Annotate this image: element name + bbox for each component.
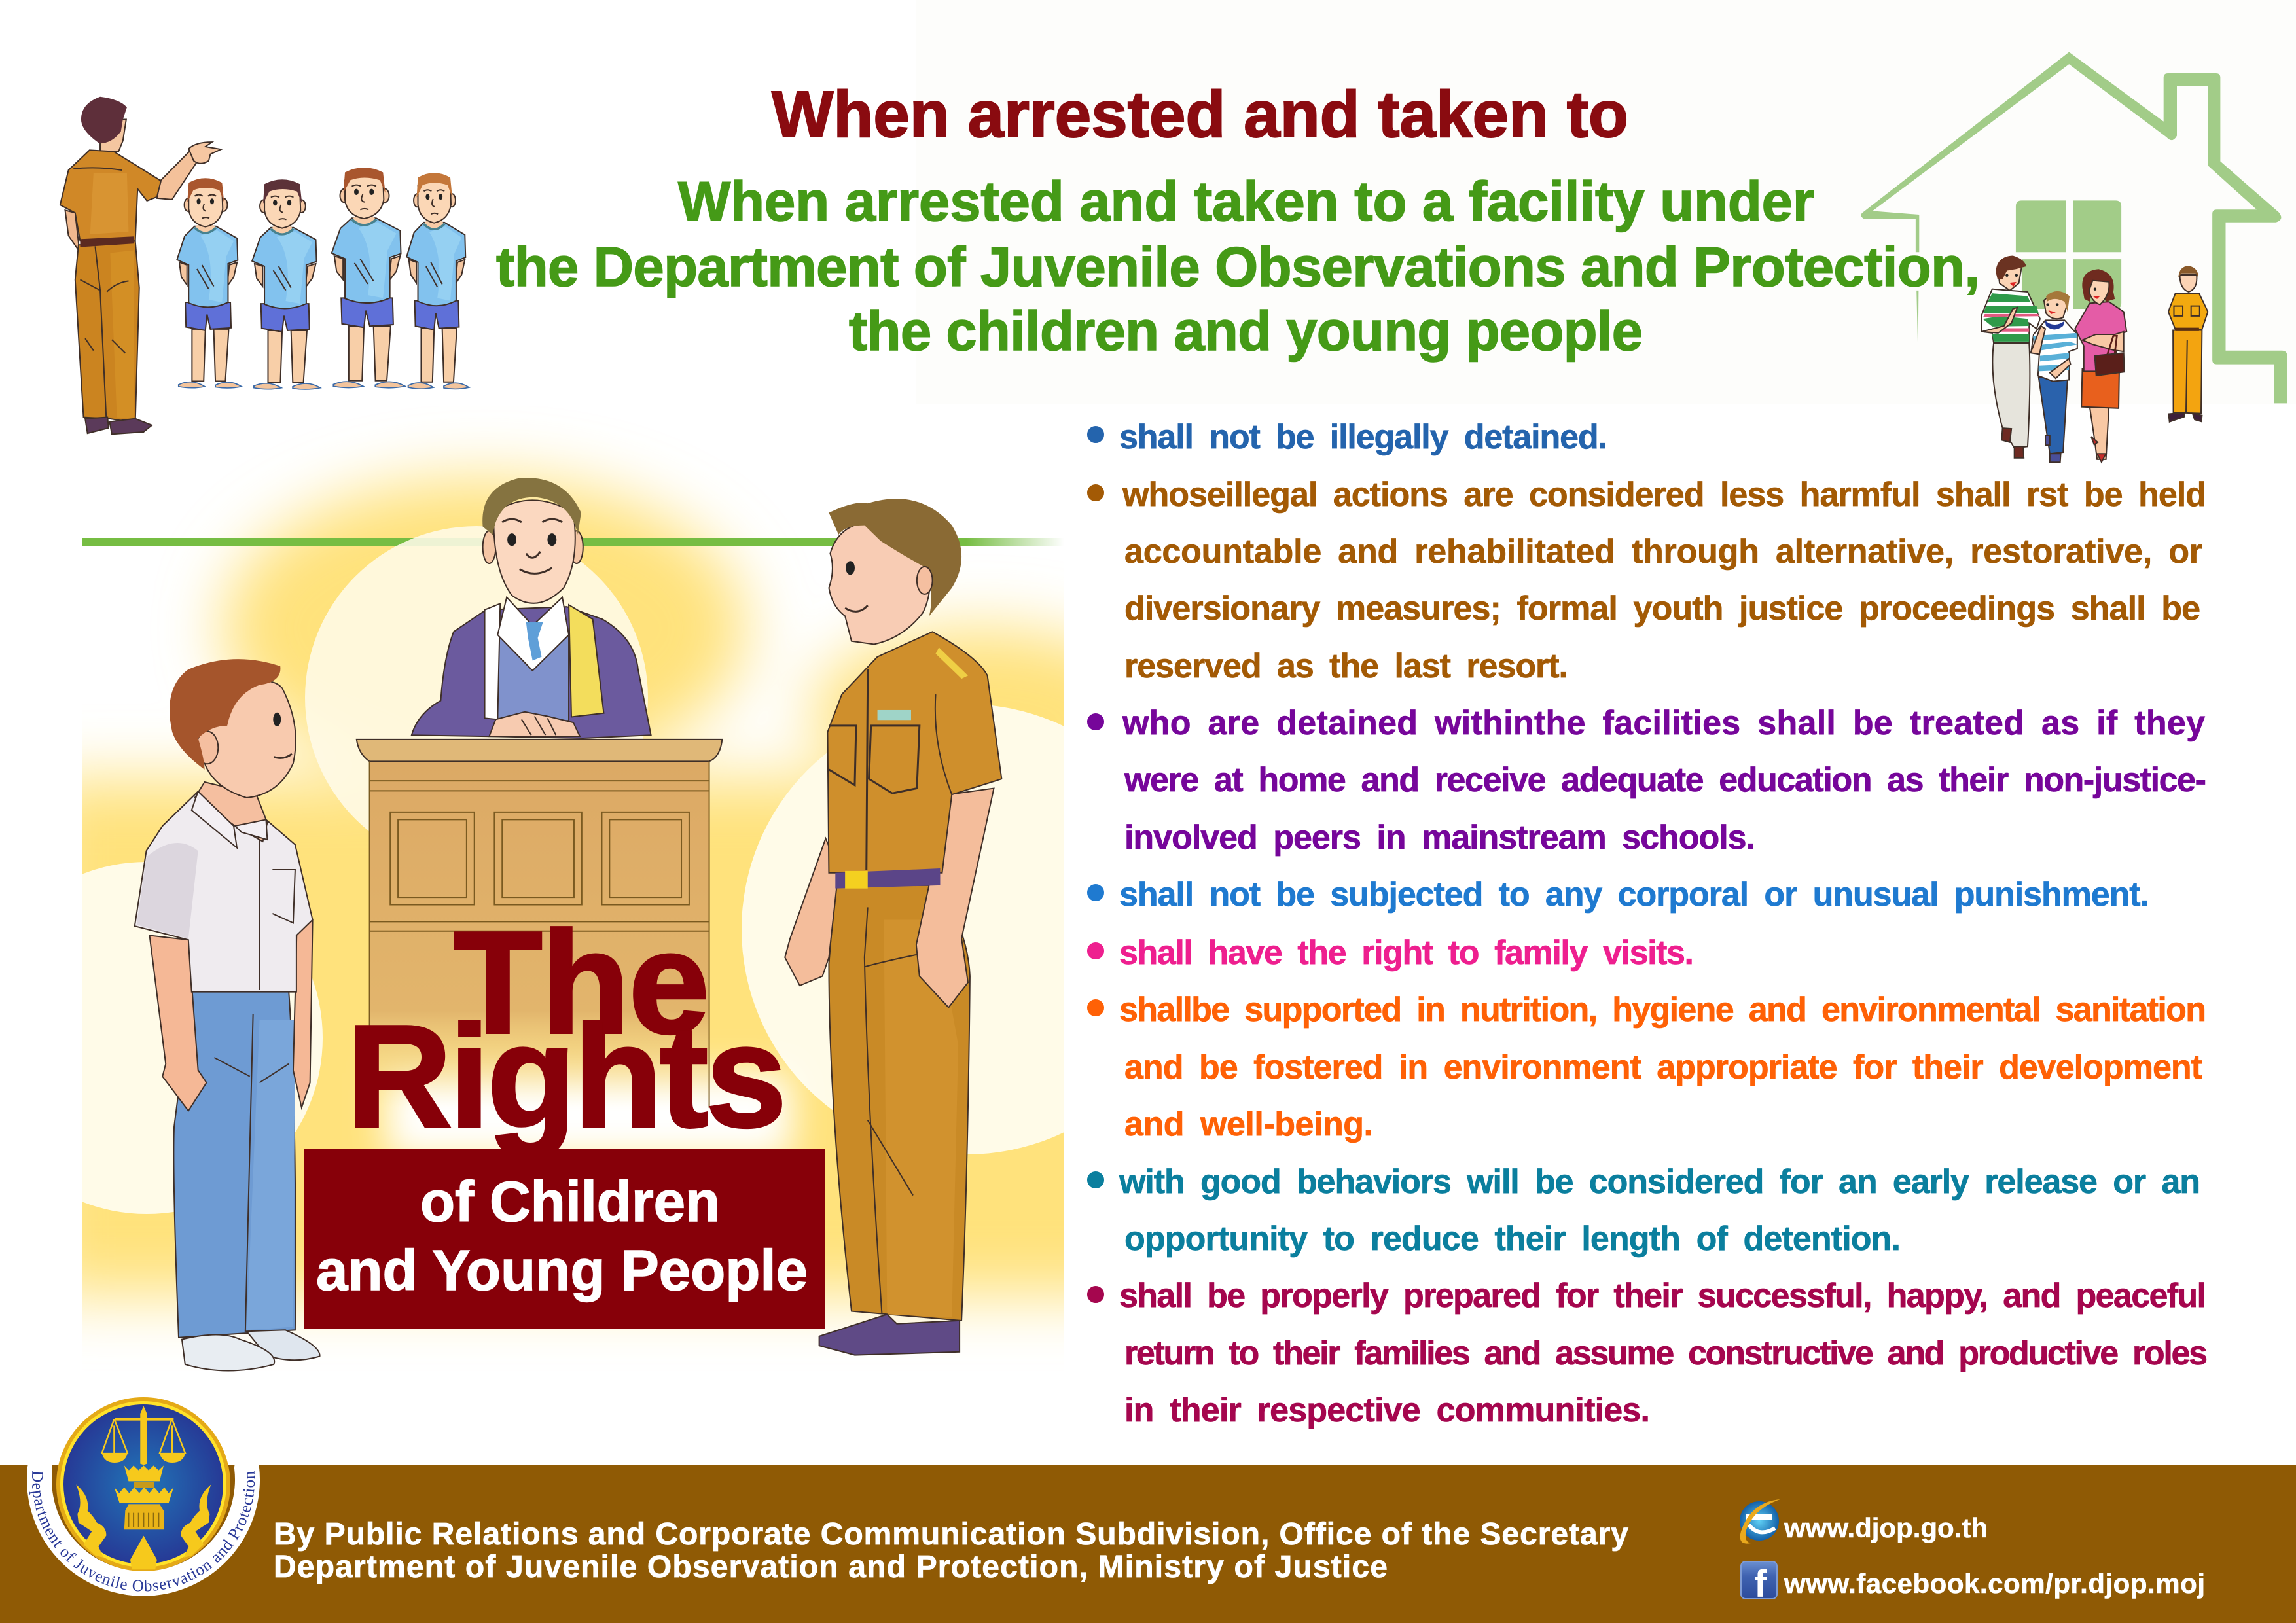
right 6: nutrition and environment: and well-being. — [1124, 1105, 1373, 1143]
icon: house window — [2016, 200, 2121, 309]
title: When arrested and taken to — [772, 78, 1628, 151]
figure: judge — [412, 478, 651, 738]
figure: boy 1 — [177, 178, 242, 388]
right 2: alternative measures — [1088, 476, 2206, 685]
right 2: alternative measures: reserved as the last resort. — [1124, 647, 1568, 685]
subtitle: When arrested and taken to a facility under — [678, 171, 1814, 233]
right 4: no corporal punishment: shall not be subjected to any corporal or unusual punishment. — [1119, 876, 2149, 914]
heading: The Rights: The — [454, 902, 709, 1064]
subtitle — [496, 171, 1980, 363]
decorative white circles — [0, 526, 1192, 1214]
website url: www.djop.go.th — [1784, 1512, 1988, 1543]
right 2: alternative measures: accountable and rehabilitated through alternative, restorative, or — [1124, 533, 2202, 571]
illustration: family and officer — [1982, 255, 2208, 462]
green horizontal line — [82, 538, 1064, 546]
right 2: alternative measures: whoseillegal actions are considered less harmful shall rst be held — [1122, 476, 2206, 514]
right 7: early release — [1088, 1163, 2200, 1258]
figure: officer — [785, 499, 1001, 1355]
emblem scales and lotus pedestal — [76, 1406, 211, 1569]
right 2: alternative measures: diversionary measures; formal youth justice proceedings shall be — [1124, 590, 2200, 628]
heading: The Rights: Rights — [347, 995, 787, 1158]
right 6: nutrition and environment: and be fostered in environment appropriate for their development — [1124, 1048, 2202, 1086]
rights list — [1088, 418, 2208, 1429]
illustration: green house outline — [1861, 52, 2287, 403]
right 8: prepared for return: return to their families and assume constructive and productive roles — [1124, 1334, 2208, 1372]
panel: court illustration — [0, 478, 1192, 1296]
facebook url: www.facebook.com/pr.djop.moj — [1784, 1568, 2205, 1599]
right 5: family visits: shall have the right to family visits. — [1119, 934, 1694, 972]
emblem ribbon: Department of Juvenile Observation and Protection — [29, 1471, 255, 1592]
figure: officer in yellow uniform — [2168, 266, 2208, 422]
heading banner: of Children and Young People — [304, 1149, 825, 1329]
icon: web browser — [1740, 1499, 1780, 1544]
right 3: treated as at home — [1088, 704, 2206, 857]
footer bar — [0, 1465, 2296, 1623]
illustration: judge, boy and officer — [135, 478, 1001, 1370]
right 3: treated as at home: who are detained withinthe facilities shall be treated as if they — [1122, 704, 2205, 742]
right 1: not illegally detained: shall not be illegally detained. — [1119, 418, 1607, 456]
figure: boy in striped shirt — [2031, 291, 2078, 462]
icon: agency emblem — [26, 1397, 260, 1596]
right 3: treated as at home: were at home and receive adequate education as their non-justice- — [1124, 761, 2206, 799]
subtitle: the children and young people — [849, 300, 1643, 363]
subtitle: the Department of Juvenile Observations and Protection, — [496, 236, 1980, 298]
icon: facebook — [1741, 1561, 1777, 1605]
right 7: early release: with good behaviors will be considered for an early release or an — [1119, 1163, 2200, 1201]
figure: officer from behind — [60, 97, 221, 434]
figure: boy 4 — [406, 173, 469, 389]
right 8: prepared for return — [1088, 1277, 2208, 1429]
right 6: nutrition and environment — [1088, 991, 2206, 1143]
decorative yellow glow — [39, 478, 1152, 1296]
figure: podium — [357, 740, 722, 1108]
figure: boy in white shirt — [135, 659, 320, 1370]
heading: The Rights — [347, 902, 787, 1158]
heading banner: of Children and Young People: of Children — [420, 1170, 720, 1234]
background tint behind house — [916, 0, 2296, 404]
decorative white glow under Rights — [386, 1073, 792, 1158]
illustration: officer addressing four boys — [60, 97, 469, 434]
right 8: prepared for return: shall be properly prepared for their successful, happy, and peaceful — [1119, 1277, 2206, 1315]
right 6: nutrition and environment: shallbe supported in nutrition, hygiene and environmental sanitation — [1119, 991, 2206, 1029]
right 8: prepared for return: in their respective communities. — [1124, 1391, 1650, 1429]
right 7: early release: opportunity to reduce their length of detention. — [1124, 1220, 1901, 1258]
footer credit text: By Public Relations and Corporate Communication Subdivision, Office of the Secretary — [274, 1517, 1628, 1552]
figure: mother — [2075, 269, 2126, 462]
heading banner: of Children and Young People: and Young People — [316, 1239, 808, 1302]
figure: boy 3 — [332, 168, 405, 388]
icon: facebook: f — [1754, 1563, 1767, 1605]
footer credit text: Department of Juvenile Observation and Protection, Ministry of Justice — [274, 1550, 1388, 1584]
figure: boy 2 — [252, 179, 321, 389]
right 3: treated as at home: involved peers in mainstream schools. — [1124, 819, 1755, 857]
footer credit text — [274, 1517, 1628, 1584]
figure: father — [1982, 255, 2040, 458]
